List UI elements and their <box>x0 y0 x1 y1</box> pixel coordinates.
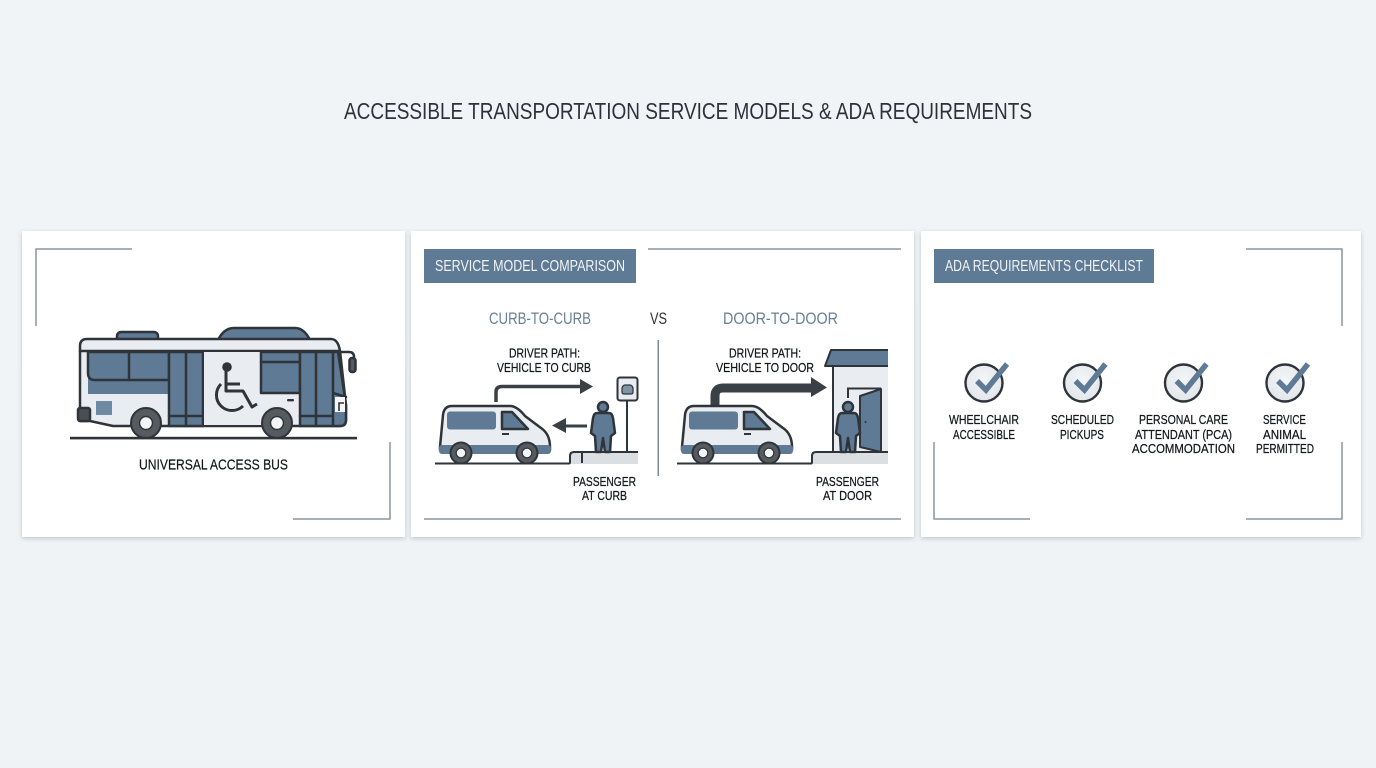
label: driver path to door: DRIVER PATH: <box>729 346 801 360</box>
label: driver path to curb: DRIVER PATH: <box>509 346 580 360</box>
label: driver path to curb <box>497 346 591 375</box>
panel: universal access bus <box>22 231 405 537</box>
label: driver path to door: VEHICLE TO DOOR <box>716 360 814 375</box>
label: universal access bus: UNIVERSAL ACCESS BUS <box>139 458 288 474</box>
checklist item: personal care attendant <box>1132 364 1235 456</box>
label: passenger at curb: AT CURB <box>582 488 627 503</box>
heading: ADA requirements checklist <box>934 249 1154 283</box>
panel: service model comparison <box>411 231 914 537</box>
icon: bus <box>70 328 357 439</box>
heading: ADA requirements checklist: ADA REQUIREMENTS CHECKLIST <box>945 258 1143 275</box>
arrow: driver path to curb <box>496 379 593 402</box>
title: ACCESSIBLE TRANSPORTATION SERVICE MODELS & ADA REQUIREMENTS <box>344 98 1032 124</box>
checklist item: service animal permitted: SERVICE <box>1263 412 1306 427</box>
checklist item: scheduled pickups: PICKUPS <box>1060 427 1104 442</box>
label: driver path to curb: VEHICLE TO CURB <box>497 360 591 375</box>
checklist item: scheduled pickups <box>1051 364 1114 442</box>
arrow: driver path to door <box>715 377 827 406</box>
checklist item: personal care attendant: ACCOMMODATION <box>1132 441 1235 456</box>
icon: passenger at curb <box>591 402 615 452</box>
checklist item: service animal permitted: PERMITTED <box>1256 441 1314 456</box>
arrow: passenger to curb <box>552 418 587 433</box>
label: passenger at door: PASSENGER <box>816 474 879 489</box>
checklist item: wheelchair accessible <box>949 364 1019 442</box>
subheading: door-to-door: DOOR-TO-DOOR <box>723 309 838 328</box>
checklist item: personal care attendant: PERSONAL CARE <box>1139 412 1228 427</box>
checklist item: wheelchair accessible: WHEELCHAIR <box>949 412 1019 427</box>
panel: ADA requirements checklist <box>921 231 1361 537</box>
label: driver path to door <box>716 346 814 375</box>
label: passenger at door: AT DOOR <box>823 488 872 503</box>
icon: bus stop sign <box>618 378 638 452</box>
checklist item: service animal permitted: ANIMAL <box>1263 427 1306 442</box>
icon: van door-to-door <box>681 406 793 464</box>
vs label: VS <box>650 309 667 328</box>
subheading: curb-to-curb: CURB-TO-CURB <box>489 309 591 328</box>
curb and ground <box>435 452 638 464</box>
icon: van curb-to-curb <box>439 406 551 464</box>
icon: building with open door <box>677 350 888 464</box>
label: passenger at curb <box>573 474 636 503</box>
heading: service model comparison: SERVICE MODEL COMPARISON <box>435 258 625 275</box>
icon: passenger at door <box>836 402 860 452</box>
checklist item: scheduled pickups: SCHEDULED <box>1051 412 1114 427</box>
checklist item: wheelchair accessible: ACCESSIBLE <box>953 427 1015 442</box>
checklist item: service animal permitted <box>1256 364 1314 456</box>
checklist item: personal care attendant: ATTENDANT (PCA) <box>1135 427 1232 442</box>
label: passenger at door <box>816 474 879 503</box>
heading: service model comparison <box>424 249 636 283</box>
label: passenger at curb: PASSENGER <box>573 474 636 489</box>
icon: wheelchair symbol <box>216 362 257 411</box>
